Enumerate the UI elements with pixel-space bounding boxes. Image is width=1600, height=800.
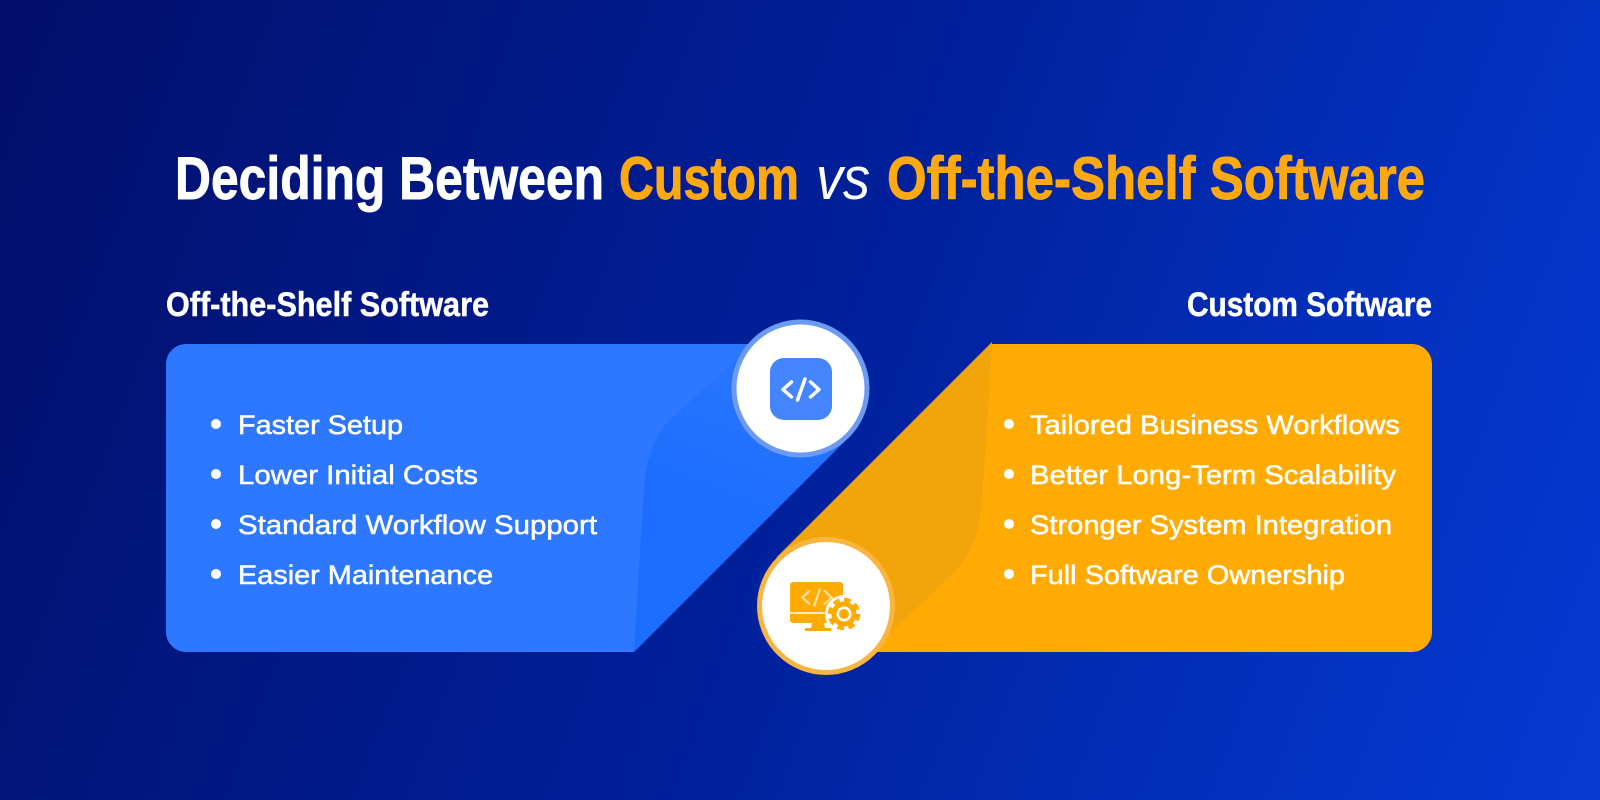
heading: off-the-shelf software: Off-the-Shelf Software <box>166 286 489 324</box>
title: vs <box>816 145 870 212</box>
list: custom benefits: Full Software Ownership <box>1030 560 1345 590</box>
title: Deciding Between <box>175 145 604 212</box>
panel fold shade: orange <box>777 342 992 652</box>
heading: custom software: Custom Software <box>1187 286 1432 324</box>
icon: code badge <box>734 322 867 455</box>
list: off-the-shelf benefits: Lower Initial Costs <box>238 460 478 490</box>
title: Custom <box>619 145 799 212</box>
icon: monitor with gear <box>760 540 892 672</box>
list: off-the-shelf benefits: Easier Maintenance <box>238 560 493 590</box>
title <box>175 145 1425 212</box>
list: off-the-shelf benefits: Faster Setup <box>238 410 403 440</box>
panel: off-the-shelf software <box>166 344 849 652</box>
panel: custom software <box>777 342 1432 652</box>
list: custom benefits: Tailored Business Workflows <box>1030 410 1400 440</box>
panel fold shade: blue <box>634 350 849 652</box>
list: custom benefits: Stronger System Integration <box>1030 510 1392 540</box>
list: custom benefits <box>1004 410 1400 590</box>
list: off-the-shelf benefits: Standard Workflow Support <box>238 510 598 540</box>
list: custom benefits: Better Long-Term Scalability <box>1030 460 1397 490</box>
list: off-the-shelf benefits <box>211 410 598 590</box>
title: Off-the-Shelf Software <box>887 145 1425 212</box>
